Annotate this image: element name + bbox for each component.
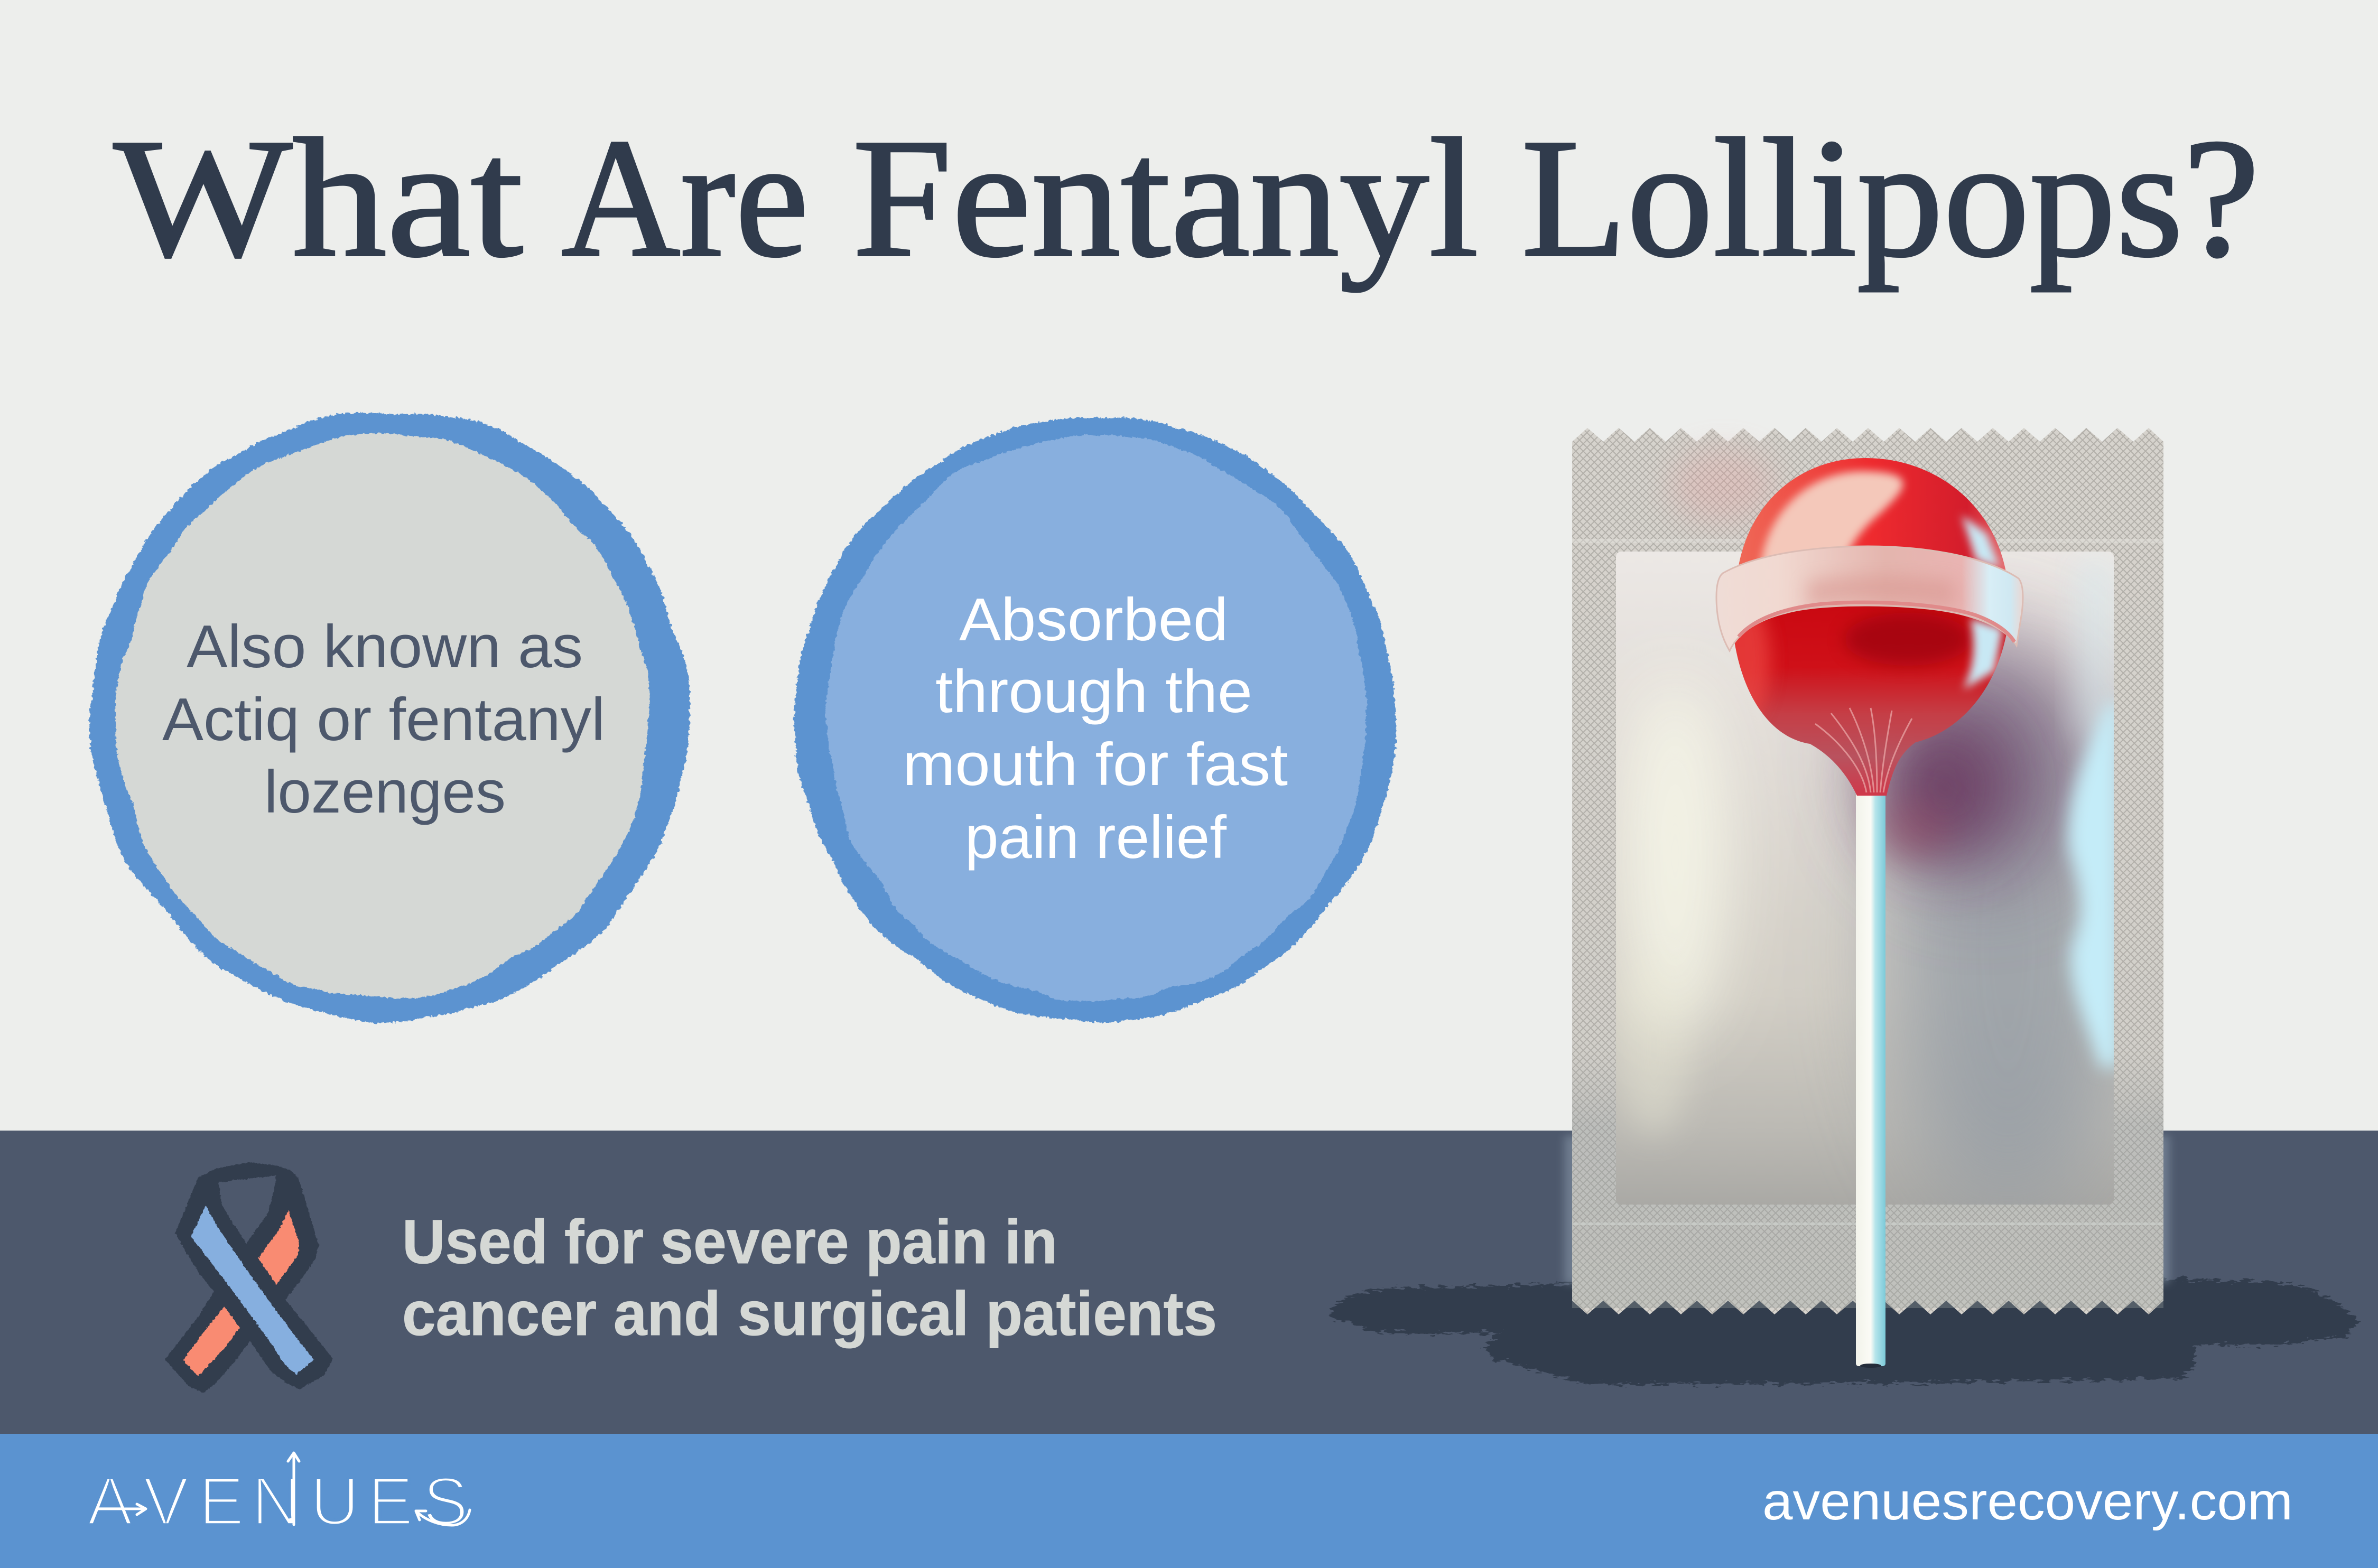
circle text: Absorbed <box>959 586 1228 654</box>
circle fill <box>118 434 648 998</box>
logo: Avenues <box>87 1453 470 1539</box>
logo arrows <box>97 1453 470 1525</box>
circle text: Actiq or fentanyl <box>162 686 605 753</box>
circle text <box>162 613 605 826</box>
dark band <box>0 1131 2378 1434</box>
website url: avenuesrecovery.com <box>1762 1472 2293 1531</box>
circle text: Also known as <box>187 613 583 680</box>
circle text: through the <box>935 658 1252 725</box>
packet inner panel <box>1616 552 2130 1215</box>
title: Fentanyl <box>852 104 1479 292</box>
circle text <box>903 586 1288 871</box>
band text <box>402 1207 1217 1349</box>
circle text: mouth for fast <box>903 731 1288 798</box>
panel: absorbed circle <box>794 416 1396 1021</box>
title: Are <box>561 104 809 292</box>
circle text: pain relief <box>965 804 1227 871</box>
logo wordmark: AVENUES <box>87 1463 468 1539</box>
candy band <box>1716 546 2023 651</box>
packet wrapper <box>1572 428 2163 1314</box>
lollipop <box>1716 458 2023 1368</box>
packet and lollipop image <box>1564 428 2170 1368</box>
circle ring <box>90 412 689 1019</box>
packet glow <box>1564 1136 2170 1284</box>
packet shadow <box>1329 1278 2358 1384</box>
band text: cancer and surgical patients <box>402 1279 1217 1349</box>
footer band <box>0 1434 2378 1568</box>
icon: ribbon <box>165 1162 333 1393</box>
panel: also known as circle <box>90 412 689 1019</box>
title: What <box>114 104 524 292</box>
circle fill <box>826 435 1367 1001</box>
title: Lollipops? <box>1521 104 2260 292</box>
lollipop stick <box>1856 792 1885 1368</box>
title <box>114 104 2260 292</box>
candy ribs <box>1815 708 1912 792</box>
candy top dome <box>1739 458 2006 571</box>
candy lower half <box>1734 606 2006 796</box>
circle text: lozenges <box>264 759 506 826</box>
circle ring <box>794 416 1396 1021</box>
band text: Used for severe pain in <box>402 1207 1057 1277</box>
